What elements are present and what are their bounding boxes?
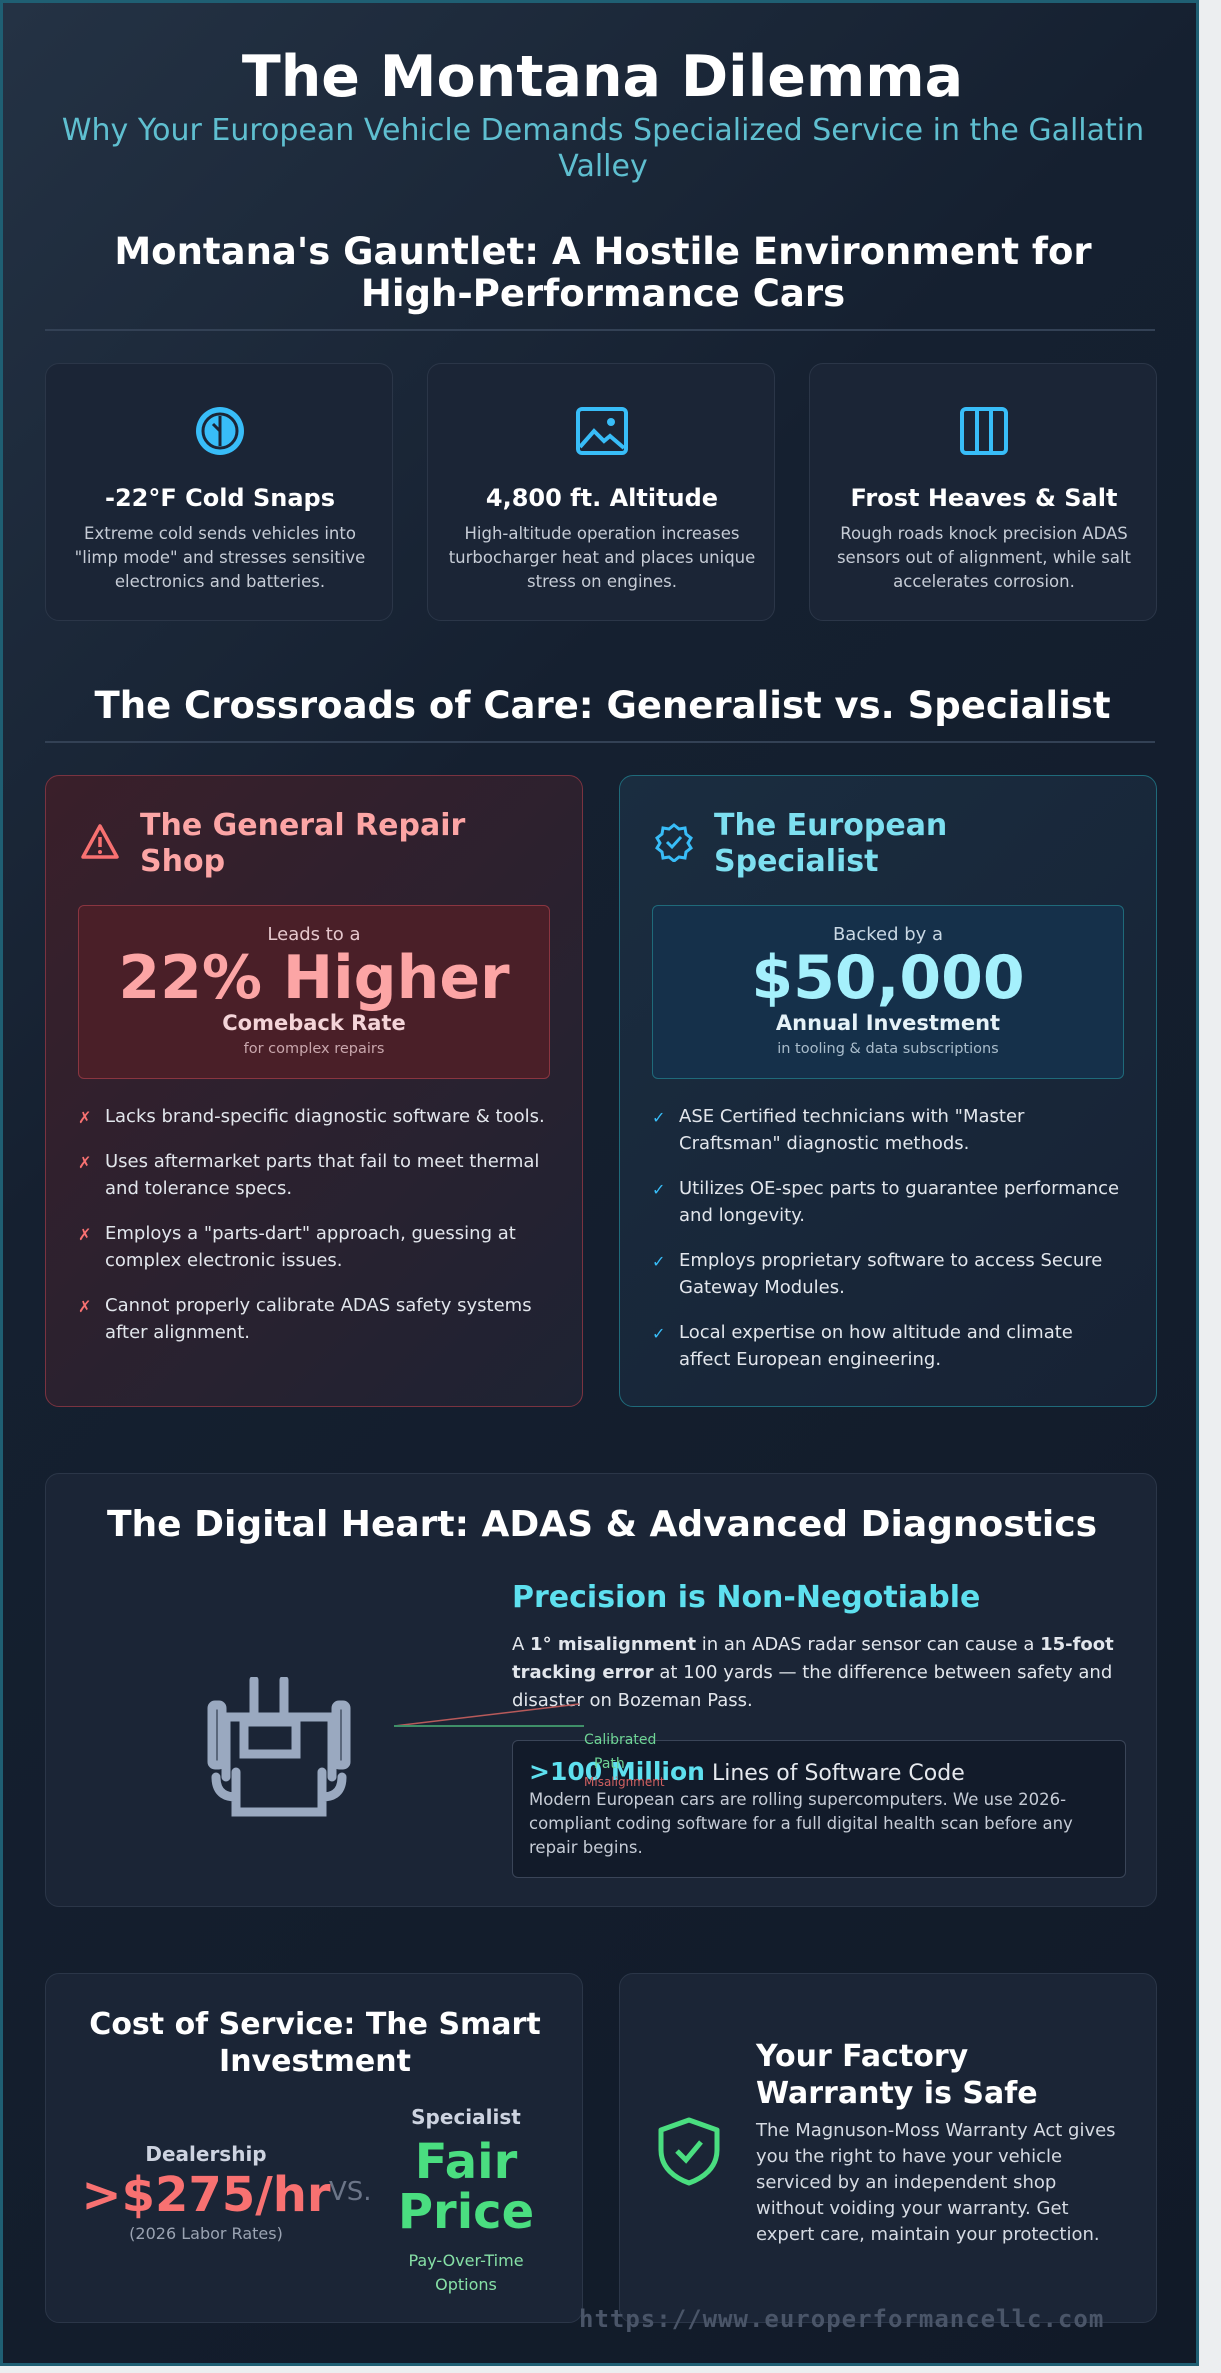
icon: shield bbox=[658, 2118, 720, 2186]
list: specialist pros: Employs proprietary software to access Secure Gateway Modules. bbox=[679, 1250, 1102, 1298]
icon: columns bbox=[960, 407, 1008, 455]
diagram: alignment lines: Calibrated bbox=[584, 1732, 656, 1748]
text: cold: -22°F Cold Snaps bbox=[105, 484, 335, 512]
list: general cons: Cannot properly calibrate ADAS safety systems after alignment. bbox=[105, 1295, 532, 1343]
list: general cons: ✗ bbox=[78, 1225, 91, 1244]
vs: VS. bbox=[329, 2177, 372, 2207]
panel: cost of service bbox=[45, 1973, 583, 2323]
panel heading: The European bbox=[714, 808, 947, 843]
text: altitude: High-altitude operation increases turbocharger heat and places unique stress on engines. bbox=[449, 524, 755, 591]
panel heading: Specialist bbox=[714, 844, 879, 879]
subtitle: Why Your European Vehicle Demands Specialized Service in the Gallatin Valley bbox=[62, 113, 1144, 184]
heading: precision: Precision is Non-Negotiable bbox=[512, 1580, 980, 1615]
dealership price: Dealership bbox=[145, 2142, 267, 2166]
list: specialist pros: ✓ bbox=[652, 1324, 665, 1343]
icon: warning bbox=[81, 824, 119, 859]
stat: $50,000: in tooling & data subscriptions bbox=[777, 1041, 999, 1057]
stat: $50,000: Annual Investment bbox=[776, 1011, 1000, 1035]
icon: mountain image bbox=[576, 407, 628, 455]
stat: $50,000: $50,000 bbox=[751, 943, 1025, 1013]
callout: 100 million bbox=[512, 1740, 1126, 1878]
panel: european specialist bbox=[619, 775, 1157, 1407]
stat: 22% higher: for complex repairs bbox=[244, 1041, 384, 1057]
icon: badge check bbox=[655, 823, 693, 862]
panel heading bbox=[714, 808, 947, 879]
panel heading: The General Repair bbox=[140, 808, 465, 843]
list: general cons: ✗ bbox=[78, 1153, 91, 1172]
heading: crossroads: The Crossroads of Care: Generalist vs. Specialist bbox=[94, 684, 1111, 727]
panel heading: Shop bbox=[140, 844, 225, 879]
heading: Your Factory bbox=[756, 2039, 968, 2074]
stat: $50,000 bbox=[652, 905, 1124, 1079]
text: altitude: 4,800 ft. Altitude bbox=[486, 484, 718, 512]
diagram: alignment lines: Misalignment bbox=[584, 1775, 665, 1789]
heading: The Digital Heart: ADAS & Advanced Diagnostics bbox=[107, 1504, 1097, 1545]
callout: 100 million: >100 Million Lines of Software Code bbox=[529, 1757, 965, 1786]
card: frost bbox=[809, 363, 1157, 621]
stat: 22% higher: 22% Higher bbox=[118, 943, 510, 1013]
text: frost: Rough roads knock precision ADAS sensors out of alignment, while salt accelerates corrosion. bbox=[837, 524, 1131, 591]
text: altitude bbox=[449, 484, 755, 591]
diagram: alignment lines: Path bbox=[594, 1756, 625, 1772]
callout: 100 million: Modern European cars are rolling supercomputers. We use 2026-compliant coding software for a full digital health scan before any repair begins. bbox=[529, 1790, 1073, 1857]
specialist price: Pay-Over-Time bbox=[408, 2251, 524, 2270]
list: general cons: ✗ bbox=[78, 1297, 91, 1316]
footer url: https://www.europerformancellc.com bbox=[579, 2305, 1104, 2333]
panel: digital heart bbox=[45, 1473, 1157, 1907]
stat: 22% higher: Comeback Rate bbox=[222, 1011, 406, 1035]
card: altitude bbox=[427, 363, 775, 621]
text: cold bbox=[75, 484, 365, 591]
list: specialist pros: ASE Certified technicians with "Master Craftsman" diagnostic methods. bbox=[679, 1106, 1024, 1154]
dealership price: (2026 Labor Rates) bbox=[129, 2224, 283, 2243]
heading bbox=[756, 2039, 1038, 2111]
specialist price: Fair bbox=[415, 2134, 517, 2190]
dealership price bbox=[81, 2142, 331, 2243]
heading: Cost of Service: The Smart Investment bbox=[89, 2007, 541, 2079]
stat: $50,000: Backed by a bbox=[833, 924, 943, 945]
panel: general shop bbox=[45, 775, 583, 1407]
specialist price: Options bbox=[435, 2275, 497, 2294]
heading: Warranty is Safe bbox=[756, 2076, 1038, 2111]
heading: gauntlet: Montana's Gauntlet: A Hostile Environment for High-Performance Cars bbox=[114, 230, 1092, 315]
stat: 22% higher: Leads to a bbox=[267, 924, 361, 945]
text: frost bbox=[837, 484, 1131, 591]
paragraph: The Magnuson-Moss Warranty Act gives you the right to have your vehicle serviced by an independent shop without voiding your warranty. Get expert care, maintain your protection. bbox=[756, 2120, 1116, 2245]
text: frost: Frost Heaves & Salt bbox=[851, 484, 1117, 512]
dealership price: >$275/hr bbox=[81, 2167, 331, 2223]
list: general cons: Uses aftermarket parts that fail to meet thermal and tolerance specs. bbox=[105, 1151, 539, 1199]
title: The Montana Dilemma bbox=[242, 44, 963, 110]
list: specialist pros bbox=[652, 1106, 1119, 1370]
paragraph: misalignment: A 1° misalignment in an ADAS radar sensor can cause a 15-foot tracking error at 100 yards — the difference between safety and disaster on Bozeman Pass. bbox=[512, 1634, 1114, 1711]
list: specialist pros: ✓ bbox=[652, 1108, 665, 1127]
icon: cold bbox=[196, 407, 244, 455]
list: specialist pros: ✓ bbox=[652, 1252, 665, 1271]
text: cold: Extreme cold sends vehicles into "limp mode" and stresses sensitive electronics and batteries. bbox=[75, 524, 365, 591]
list: specialist pros: ✓ bbox=[652, 1180, 665, 1199]
list: general cons: Employs a "parts-dart" approach, guessing at complex electronic issues. bbox=[105, 1223, 516, 1271]
panel heading bbox=[140, 808, 466, 879]
list: general cons: ✗ bbox=[78, 1108, 91, 1127]
specialist price: Specialist bbox=[411, 2105, 521, 2129]
list: general cons: Lacks brand-specific diagnostic software & tools. bbox=[105, 1106, 545, 1127]
card: cold bbox=[45, 363, 393, 621]
icon: car seat/sensor bbox=[208, 1677, 350, 1816]
stat: 22% higher bbox=[78, 905, 550, 1079]
list: specialist pros: Local expertise on how altitude and climate affect European engineering. bbox=[679, 1322, 1073, 1370]
diagram: alignment lines bbox=[394, 1703, 665, 1789]
specialist price: Price bbox=[398, 2184, 534, 2240]
list: specialist pros: Utilizes OE-spec parts to guarantee performance and longevity. bbox=[679, 1178, 1119, 1226]
panel: warranty bbox=[619, 1973, 1157, 2323]
list: general cons bbox=[78, 1106, 545, 1343]
specialist price bbox=[398, 2105, 534, 2294]
